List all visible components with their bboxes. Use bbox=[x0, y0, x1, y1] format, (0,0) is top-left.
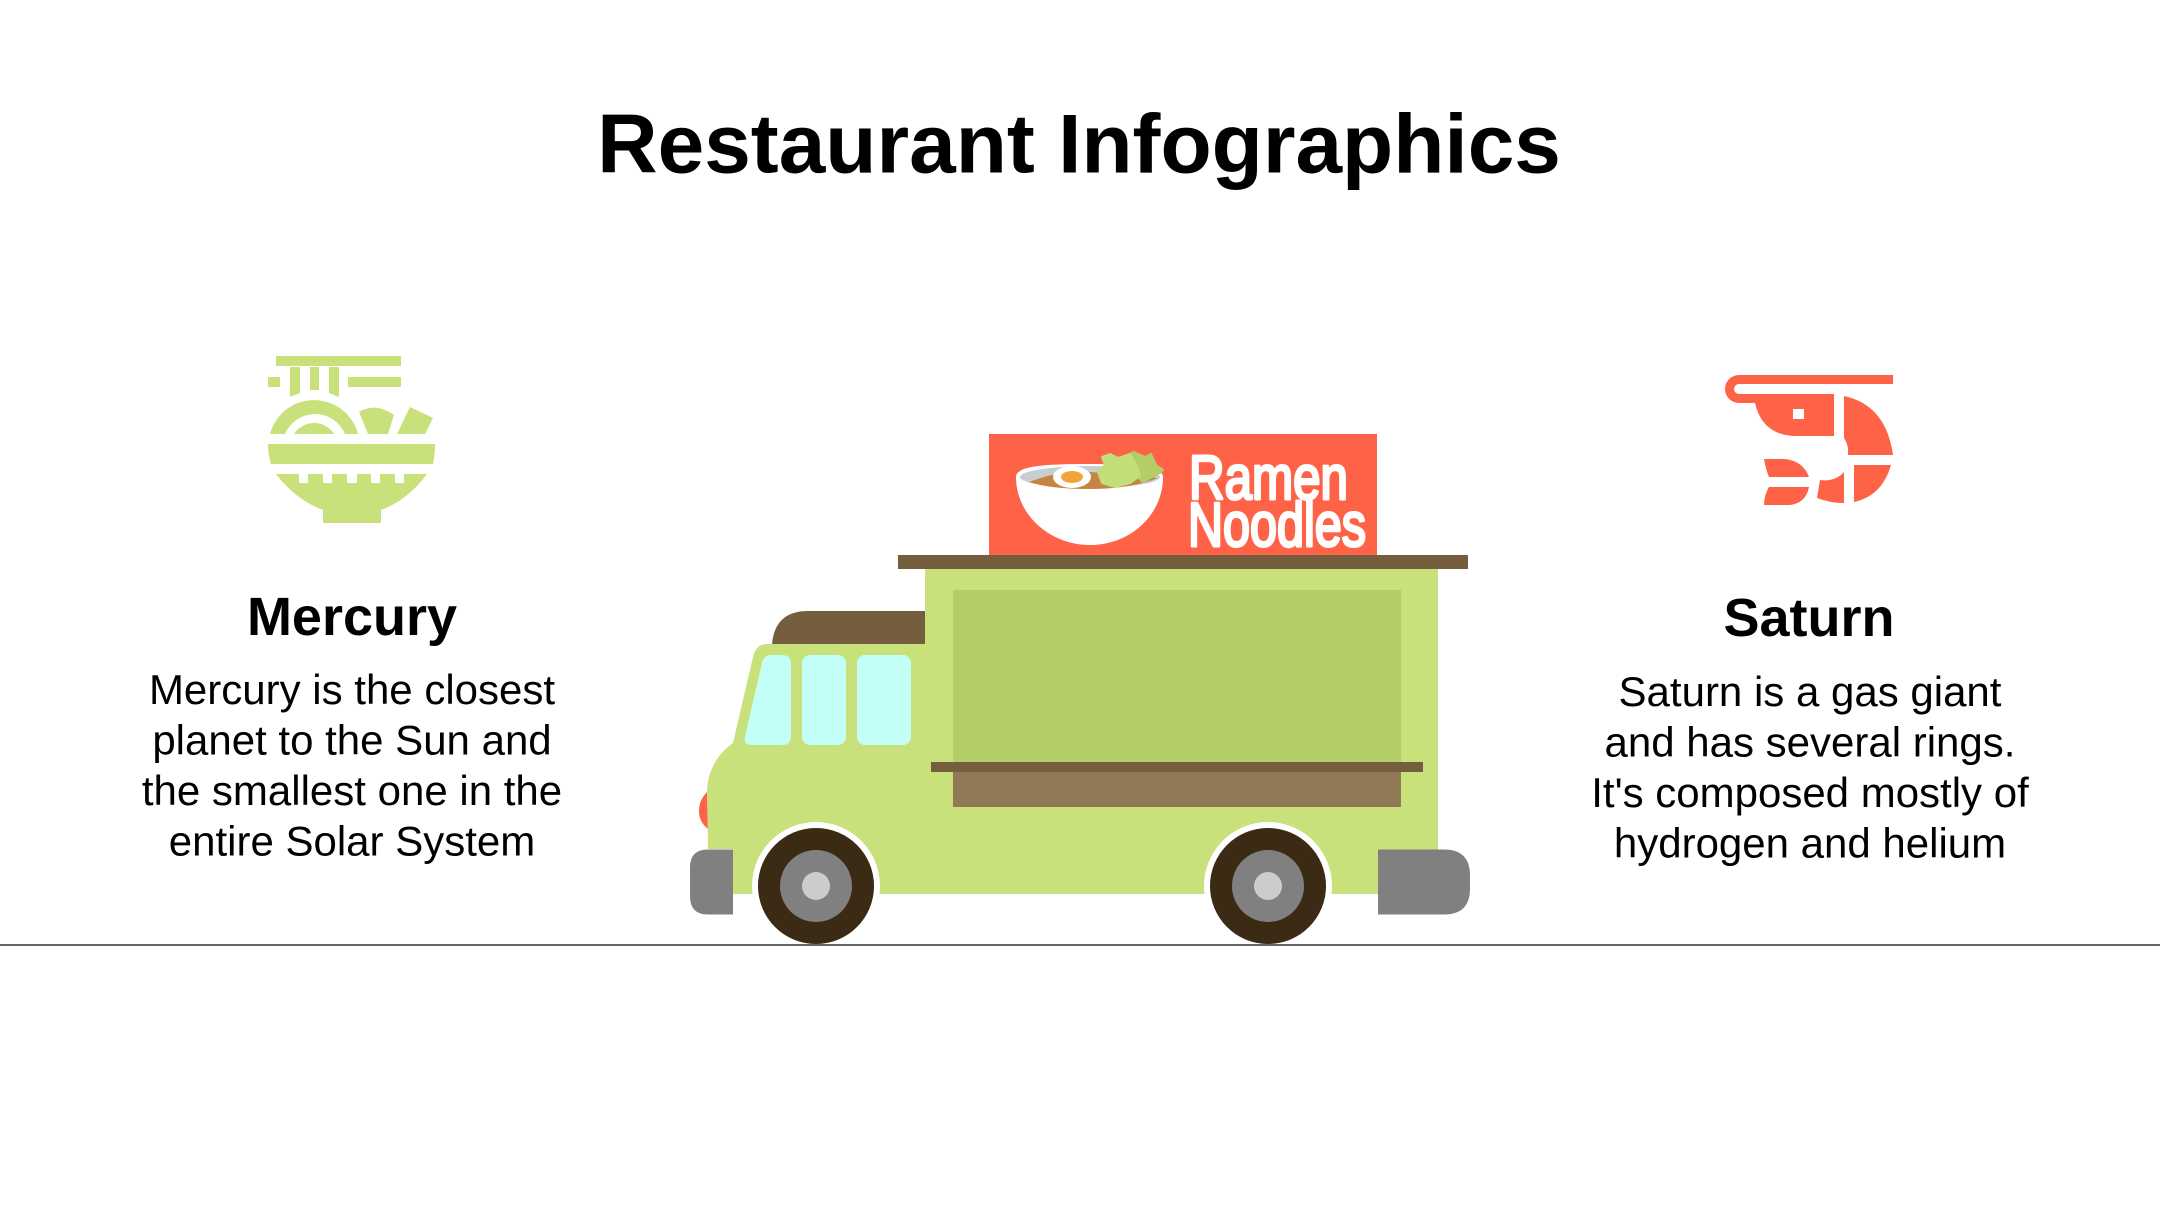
text: Saturn description: Saturn is a gas giant bbox=[1619, 668, 2002, 715]
truck body bbox=[707, 569, 1438, 894]
text: Saturn description: hydrogen and helium bbox=[1614, 820, 2006, 866]
text: Saturn description: and has several rings. bbox=[1605, 718, 2015, 766]
truck counter bbox=[953, 772, 1401, 807]
text: Mercury description: Mercury is the closest bbox=[149, 666, 555, 713]
icon: shrimp bbox=[1725, 375, 1893, 505]
icon: ramen bowl bbox=[1016, 452, 1163, 545]
sign text: Ramen Noodles bbox=[1188, 444, 1366, 560]
sign board bbox=[989, 434, 1377, 560]
truck bumpers bbox=[690, 850, 1470, 914]
truck service window bbox=[953, 590, 1401, 762]
truck shelf bbox=[931, 762, 1423, 772]
title: Restaurant Infographics bbox=[597, 96, 1561, 190]
wheel: rear bbox=[1204, 822, 1332, 950]
food truck bbox=[690, 434, 1470, 950]
text: Mercury description: entire Solar System bbox=[169, 818, 535, 864]
truck windows bbox=[745, 655, 911, 745]
text: Saturn description bbox=[1591, 668, 2029, 866]
truck roof bbox=[898, 555, 1468, 569]
sign text: Ramen Noodles: Noodles bbox=[1188, 491, 1366, 560]
text: Mercury description: the smallest one in the bbox=[142, 767, 562, 814]
text: Mercury description: planet to the Sun and bbox=[152, 716, 552, 764]
sign text: Ramen Noodles: Ramen bbox=[1189, 444, 1348, 513]
panel: Saturn bbox=[1591, 375, 2029, 866]
icon: noodle bowl bbox=[268, 356, 435, 523]
heading: Saturn: Saturn bbox=[1723, 588, 1895, 648]
wheel: front bbox=[752, 822, 880, 950]
text: Mercury description bbox=[142, 666, 562, 864]
truck cab roof bbox=[772, 611, 925, 644]
text: Saturn description: It's composed mostly of bbox=[1591, 769, 2029, 816]
ground line bbox=[0, 944, 2160, 946]
panel: Mercury bbox=[142, 356, 562, 864]
truck tail light bbox=[699, 792, 708, 829]
heading: Mercury: Mercury bbox=[247, 587, 457, 647]
